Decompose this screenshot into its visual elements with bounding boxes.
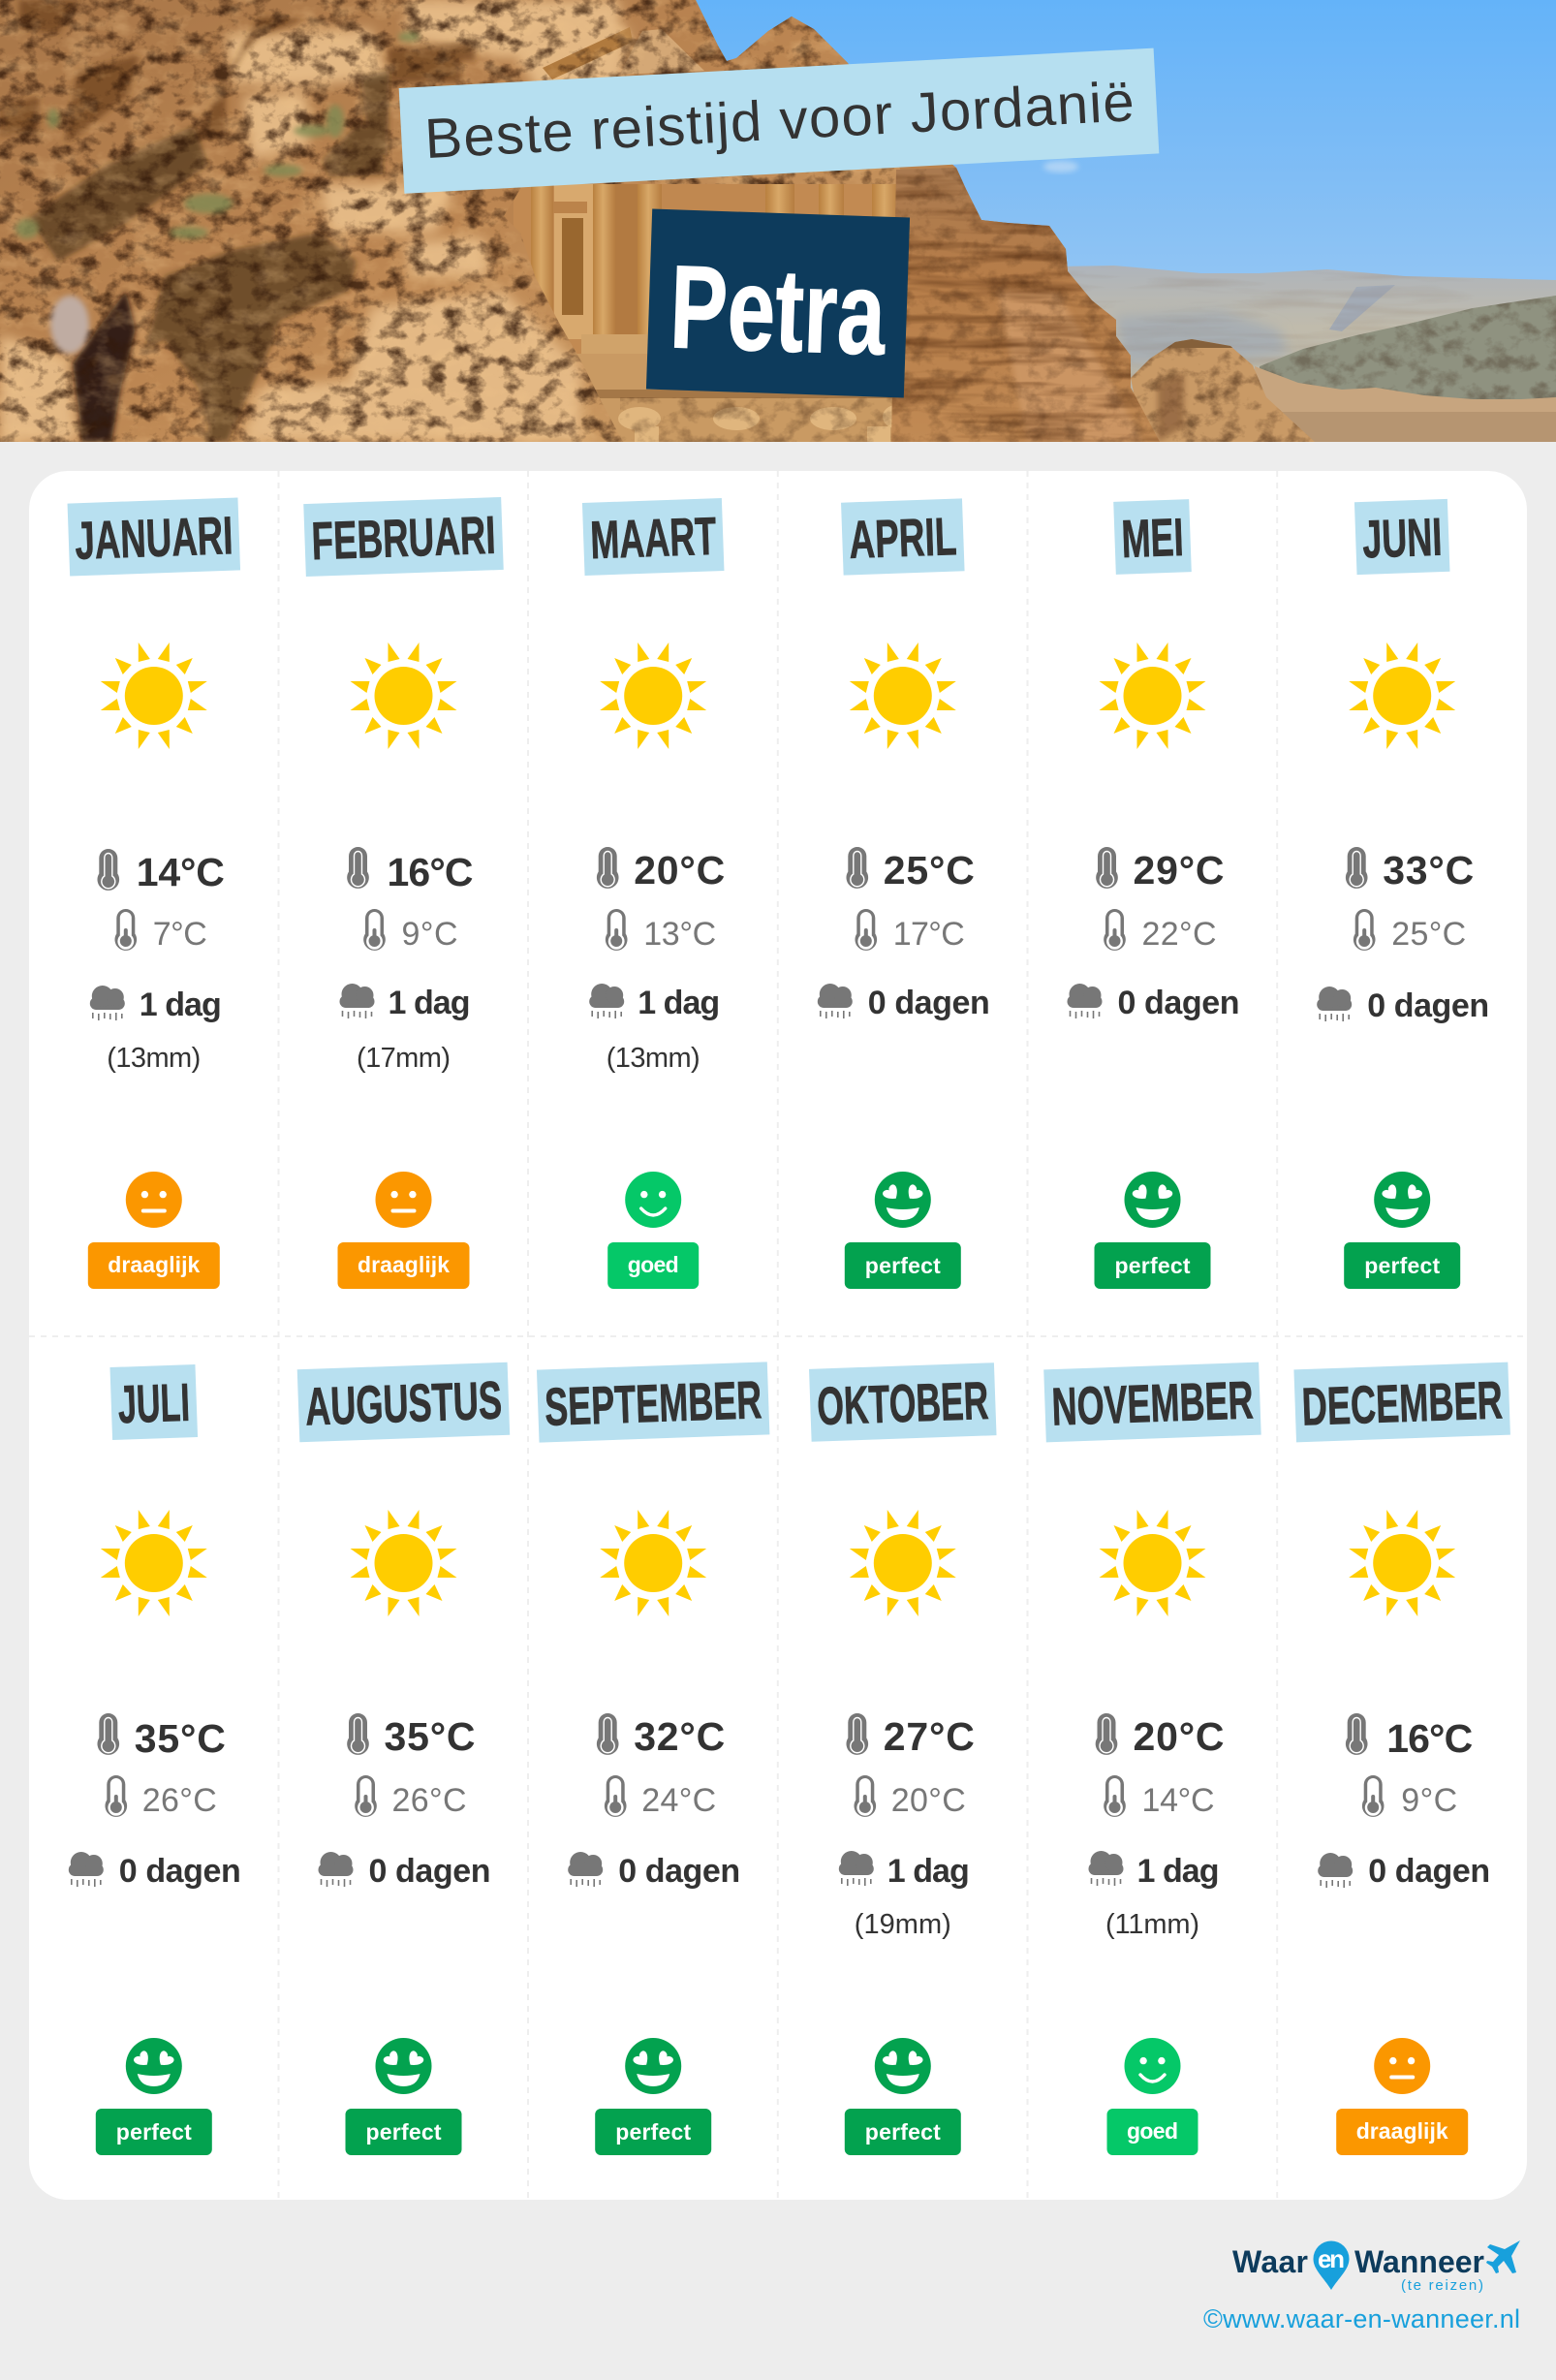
rainfall xyxy=(1317,986,1489,1024)
rating xyxy=(845,1172,961,1289)
month label: JULI xyxy=(117,1372,191,1434)
icon: sun xyxy=(101,1510,207,1616)
rating: perfect xyxy=(1114,1253,1191,1278)
rainfall: 0 dagen xyxy=(868,985,990,1021)
rainfall: 1 dag xyxy=(887,1853,970,1890)
month label: JANUARI xyxy=(74,505,233,571)
max temperature xyxy=(1346,1713,1473,1761)
rating: perfect xyxy=(116,2119,192,2145)
rainfall: 1 dag xyxy=(638,985,720,1021)
month label: FEBRUARI xyxy=(311,505,497,571)
rainfall: 1 dag xyxy=(1137,1853,1219,1890)
icon: sun xyxy=(850,642,956,749)
min temperature xyxy=(855,1775,966,1819)
min temperature: 17°C xyxy=(893,916,965,953)
icon: plane xyxy=(1486,2240,1520,2273)
rainfall xyxy=(318,1852,490,1890)
rating: goed xyxy=(628,1252,679,1277)
rainfall: (17mm) xyxy=(357,1043,451,1074)
logo: Waar en Wanneer: Waar xyxy=(1232,2244,1308,2279)
month label: OKTOBER xyxy=(816,1370,989,1436)
max temperature xyxy=(347,1713,475,1759)
min temperature xyxy=(355,1775,467,1819)
month cell: april xyxy=(818,498,990,1289)
min temperature: 26°C xyxy=(391,1782,467,1819)
min temperature xyxy=(1362,1775,1457,1819)
max temperature xyxy=(1096,1713,1225,1759)
icon: sun xyxy=(600,1510,706,1616)
min temperature: 7°C xyxy=(153,916,207,953)
min temperature xyxy=(1104,1775,1215,1819)
min temperature xyxy=(605,1775,716,1819)
rating: perfect xyxy=(615,2119,692,2145)
max temperature xyxy=(847,847,975,892)
icon: sun xyxy=(1349,642,1455,749)
rating xyxy=(1095,1172,1211,1289)
rating xyxy=(337,1172,469,1289)
rainfall xyxy=(90,986,222,1074)
max temperature xyxy=(597,1713,725,1759)
rainfall xyxy=(1089,1851,1219,1940)
month label xyxy=(809,1362,997,1442)
max temperature xyxy=(847,1713,975,1759)
min temperature xyxy=(1354,909,1466,953)
max temperature xyxy=(1346,847,1474,892)
min temperature xyxy=(105,1775,217,1819)
rainfall: 0 dagen xyxy=(1368,1853,1490,1890)
rainfall: 0 dagen xyxy=(368,1853,490,1890)
max temperature: 25°C xyxy=(884,848,975,892)
min temperature xyxy=(606,909,716,953)
icon: sun xyxy=(351,642,457,749)
month label xyxy=(1113,499,1192,575)
max temperature: 35°C xyxy=(135,1716,226,1761)
min temperature: 14°C xyxy=(1141,1782,1215,1819)
max temperature: 32°C xyxy=(634,1714,725,1759)
month label: MEI xyxy=(1120,507,1185,569)
destination label: Petra: Petra xyxy=(669,240,888,380)
title band: Beste reistijd voor Jordanië xyxy=(423,70,1136,171)
max temperature: 20°C xyxy=(1134,1714,1225,1759)
month label xyxy=(1354,499,1449,575)
icon: sun xyxy=(1099,1510,1205,1616)
max temperature xyxy=(97,849,225,894)
month cell: februari xyxy=(303,497,504,1289)
icon: sun xyxy=(101,642,207,749)
month label xyxy=(109,1364,198,1440)
month cell: december xyxy=(1293,1362,1510,2155)
max temperature xyxy=(1096,847,1225,892)
rainfall xyxy=(839,1851,970,1940)
max temperature: 16°C xyxy=(1386,1716,1473,1761)
rainfall xyxy=(1068,984,1240,1021)
title band xyxy=(399,48,1159,194)
rating xyxy=(345,2038,461,2155)
month label xyxy=(68,497,240,577)
icon: sun xyxy=(351,1510,457,1616)
month label: JUNI xyxy=(1361,507,1443,569)
icon: sun xyxy=(600,642,706,749)
min temperature xyxy=(114,909,207,953)
max temperature xyxy=(97,1713,226,1761)
min temperature: 9°C xyxy=(401,916,457,953)
temple facade xyxy=(513,174,920,442)
month cell: januari xyxy=(68,497,240,1289)
month label xyxy=(537,1362,769,1443)
max temperature: 14°C xyxy=(137,850,225,894)
rainfall xyxy=(589,984,720,1074)
rating xyxy=(595,2038,711,2155)
calendar card xyxy=(29,471,1527,2200)
month cell: mei xyxy=(1068,499,1240,1289)
min temperature: 9°C xyxy=(1401,1782,1457,1819)
month cell: oktober xyxy=(809,1362,997,2155)
month label xyxy=(303,497,504,577)
logo: Waar en Wanneer: Wanneer xyxy=(1354,2244,1484,2279)
month label: NOVEMBER xyxy=(1050,1369,1255,1437)
rainfall: 1 dag xyxy=(140,986,222,1023)
destination label: Petra xyxy=(646,209,910,397)
max temperature: 16°C xyxy=(388,850,473,894)
rainfall: 0 dagen xyxy=(1367,987,1489,1024)
rainfall xyxy=(818,984,990,1021)
rainfall: 0 dagen xyxy=(1118,985,1240,1021)
right cliff xyxy=(891,165,1172,442)
month label: APRIL xyxy=(848,506,957,570)
rainfall: (19mm) xyxy=(855,1909,951,1940)
rating: draaglijk xyxy=(108,1252,201,1277)
min temperature xyxy=(363,909,457,953)
month label: SEPTEMBER xyxy=(544,1369,762,1437)
max temperature: 33°C xyxy=(1383,848,1474,892)
rainfall xyxy=(568,1852,740,1890)
rating: perfect xyxy=(1364,1253,1441,1278)
month cell: juli xyxy=(69,1364,241,2155)
rating: perfect xyxy=(865,1253,941,1278)
min temperature: 25°C xyxy=(1391,916,1466,953)
min temperature: 20°C xyxy=(891,1782,966,1819)
month label xyxy=(582,498,724,576)
rainfall xyxy=(339,984,471,1074)
max temperature: 20°C xyxy=(634,848,725,892)
logo: Waar en Wanneer: (te reizen) xyxy=(1401,2277,1483,2294)
min temperature xyxy=(855,909,965,953)
min temperature: 22°C xyxy=(1141,916,1217,953)
max temperature xyxy=(347,847,473,894)
main rock base xyxy=(0,0,1160,442)
month label: MAART xyxy=(589,506,717,570)
logo: Waar en Wanneer: en xyxy=(1318,2244,1345,2273)
max temperature: 29°C xyxy=(1134,848,1225,892)
rainfall xyxy=(69,1852,241,1890)
max temperature: 35°C xyxy=(384,1714,475,1759)
month label: AUGUSTUS xyxy=(304,1369,503,1437)
rainfall: (11mm) xyxy=(1105,1909,1199,1940)
max temperature: 27°C xyxy=(884,1714,975,1759)
rainfall: (13mm) xyxy=(607,1043,700,1074)
icon: map pin xyxy=(1314,2240,1349,2290)
rating: goed xyxy=(1127,2118,1178,2144)
rating: draaglijk xyxy=(1356,2118,1448,2144)
min temperature: 26°C xyxy=(142,1782,217,1819)
rating: perfect xyxy=(366,2119,442,2145)
rating xyxy=(1344,1172,1460,1289)
month cell: september xyxy=(537,1362,769,2155)
max temperature xyxy=(597,847,725,892)
month cell: november xyxy=(1043,1362,1261,2155)
rating xyxy=(845,2038,961,2155)
min temperature: 24°C xyxy=(641,1782,716,1819)
min temperature xyxy=(1104,909,1217,953)
month cell: maart xyxy=(582,498,725,1289)
rating xyxy=(88,1172,220,1289)
month label xyxy=(841,498,965,576)
rating: draaglijk xyxy=(358,1252,450,1277)
header photo: Petra monastery and valley xyxy=(0,0,1556,442)
month cell: juni xyxy=(1317,499,1489,1289)
logo: Waar en Wanneer xyxy=(1232,2240,1520,2294)
website credit: ©www.waar-en-wanneer.nl xyxy=(1203,2304,1520,2333)
rainfall: 1 dag xyxy=(388,985,471,1021)
rating xyxy=(1336,2038,1468,2155)
rainfall: 0 dagen xyxy=(119,1853,241,1890)
month cell: augustus xyxy=(297,1362,510,2155)
rating xyxy=(96,2038,212,2155)
icon: sun xyxy=(850,1510,956,1616)
rainfall: (13mm) xyxy=(107,1043,201,1074)
rainfall: 0 dagen xyxy=(618,1853,740,1890)
icon: sun xyxy=(1349,1510,1455,1616)
min temperature: 13°C xyxy=(643,916,716,953)
rating xyxy=(607,1172,699,1289)
left rock wall xyxy=(0,0,911,442)
rating: perfect xyxy=(865,2119,941,2145)
icon: sun xyxy=(1099,642,1205,749)
month label xyxy=(1043,1362,1261,1442)
rating xyxy=(1106,2038,1198,2155)
month label xyxy=(297,1362,510,1442)
